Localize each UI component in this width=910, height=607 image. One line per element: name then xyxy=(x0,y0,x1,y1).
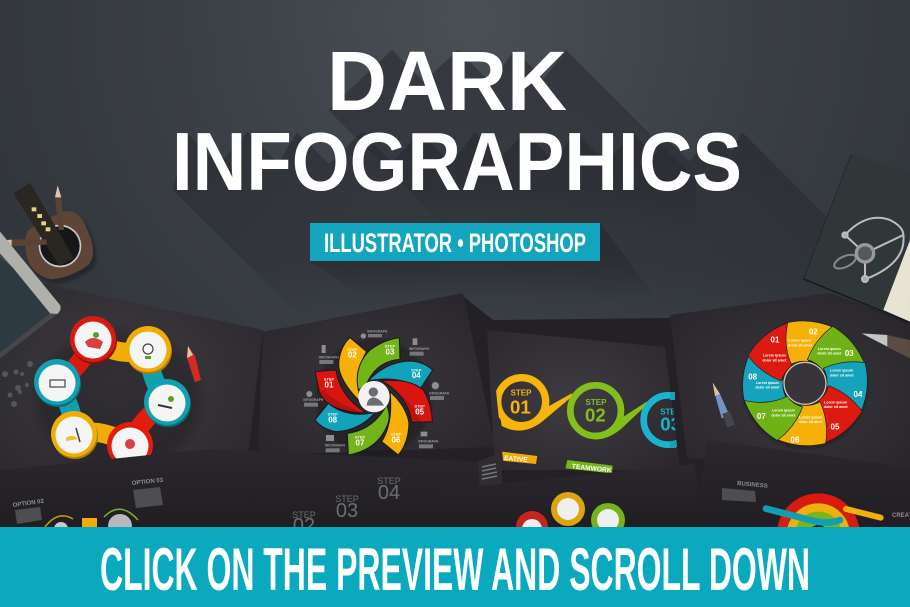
panel: lower left sheet xyxy=(0,449,218,527)
icon: pen xyxy=(862,333,910,358)
side captions: INFOGRAPH xyxy=(409,347,430,351)
step 03 text xyxy=(660,408,676,430)
label creative xyxy=(502,452,537,464)
infographic: six circle ring xyxy=(34,316,200,470)
petal 01 xyxy=(315,370,367,413)
step 01 ring xyxy=(498,378,573,431)
petal 06 xyxy=(382,392,409,455)
center person icon xyxy=(358,381,390,412)
icon: silver ornament xyxy=(832,218,904,282)
lower middle steps: 04 xyxy=(378,482,400,504)
segment captions: Lorem ipsum xyxy=(799,415,823,419)
step 03 text: STEP xyxy=(660,407,682,416)
segment numbers: 01 xyxy=(771,336,780,345)
segment captions: Lorem ipsum xyxy=(772,409,796,413)
side captions xyxy=(303,329,450,448)
segment captions: dolor sit amet xyxy=(799,420,823,424)
panel: wheel four sheet xyxy=(670,293,910,470)
segment captions: dolor sit amet xyxy=(771,413,796,417)
segment captions: Lorem ipsum xyxy=(763,354,787,358)
label creative: EATIVE xyxy=(504,455,528,464)
step teal left xyxy=(34,359,81,407)
petal 02 xyxy=(339,338,367,402)
lower middle steps: STEP xyxy=(335,494,359,504)
step labels xyxy=(324,344,425,447)
segment numbers: 04 xyxy=(854,390,863,399)
connectors xyxy=(57,340,167,445)
icon: ruler xyxy=(13,183,74,266)
step 01 text: 01 xyxy=(510,396,531,417)
step 01 text: STEP xyxy=(511,389,532,398)
step 03 ring xyxy=(640,392,677,448)
segment numbers: 07 xyxy=(757,412,766,421)
lower right captions: BUSINESS xyxy=(737,481,768,490)
panel: lower right sheet xyxy=(695,440,910,527)
ring hole xyxy=(783,362,827,405)
lower middle steps: 03 xyxy=(336,500,358,522)
segment captions: Lorem ipsum xyxy=(789,339,812,343)
lower left sheet text: OPTION 03 xyxy=(132,478,164,487)
step 02 text: 02 xyxy=(585,405,606,426)
step labels: 05 xyxy=(415,407,425,416)
panel: lower right stack xyxy=(440,464,700,527)
side captions: INFOGRAPH xyxy=(429,391,450,395)
step red bottom xyxy=(107,422,153,468)
infographic: spiral eight steps xyxy=(303,329,450,455)
petal 08 xyxy=(315,403,375,432)
segment numbers: 08 xyxy=(748,372,758,381)
step labels: 02 xyxy=(348,351,357,360)
segment captions: dolor sit amet xyxy=(762,358,787,362)
title: DARK xyxy=(327,34,567,128)
petal 05 xyxy=(382,380,432,422)
notebook with ornament xyxy=(803,153,910,323)
step labels: STEP xyxy=(347,347,358,352)
lower middle steps: STEP xyxy=(377,476,401,486)
tablet xyxy=(0,232,61,358)
side captions: INFOGRAPH xyxy=(319,355,339,359)
panel: wheel one sheet xyxy=(0,275,263,480)
step labels: STEP xyxy=(324,377,335,382)
label teamwork xyxy=(565,460,613,474)
lower left sheet chart xyxy=(45,509,138,527)
lower right caption lines xyxy=(722,488,756,502)
petal shading xyxy=(319,381,422,422)
badge: illustrator photoshop xyxy=(310,223,600,261)
panel: wheel two sheet xyxy=(258,293,495,455)
step 02 ring xyxy=(570,385,648,439)
segment captions: dolor sit amet xyxy=(817,352,842,356)
segment captions: dolor sit amet xyxy=(788,343,813,347)
side captions: INFOGRAPH xyxy=(418,440,439,444)
segment captions: Lorem ipsum xyxy=(830,369,854,373)
step labels: 04 xyxy=(412,371,421,380)
small teal lines at sheet edge xyxy=(670,392,676,448)
step labels: STEP xyxy=(327,412,338,417)
lower middle steps: 02 xyxy=(293,515,315,537)
step labels: STEP xyxy=(355,435,366,440)
segment captions: Lorem ipsum xyxy=(824,400,848,404)
icon: red pencil xyxy=(187,346,201,382)
panel: wheel three sheet xyxy=(487,330,680,470)
lower middle steps: STEP xyxy=(292,510,316,520)
lower middle steps xyxy=(292,476,401,537)
title long shadows xyxy=(173,50,872,320)
icon: pencil horizontal xyxy=(0,239,47,246)
step labels: 06 xyxy=(392,435,401,444)
step labels: 03 xyxy=(386,347,395,356)
lower left sheet text: OPTION 02 xyxy=(12,499,45,509)
petal 04 xyxy=(368,361,433,389)
panel: lower middle sheet xyxy=(208,449,485,527)
icon: blue pencil xyxy=(713,383,735,427)
badge: illustrator photoshop: ILLUSTRATOR • PHOTOSHOP xyxy=(324,228,586,258)
segment numbers: 03 xyxy=(845,349,854,358)
segments xyxy=(739,318,871,449)
segment captions: dolor sit amet xyxy=(830,373,854,377)
segment captions: Lorem ipsum xyxy=(818,347,842,351)
step 03 text: 03 xyxy=(660,414,681,435)
title xyxy=(172,34,742,208)
step labels: 07 xyxy=(356,438,365,447)
side captions: INFOGRAPH xyxy=(367,329,388,333)
segment numbers: 05 xyxy=(831,422,840,431)
side icons xyxy=(306,333,439,441)
side captions: INFOGRAPH xyxy=(325,444,346,448)
step labels: STEP xyxy=(414,404,425,409)
segment numbers: 02 xyxy=(809,327,818,336)
step labels: 08 xyxy=(328,415,338,424)
step red top xyxy=(70,316,117,364)
step teal right xyxy=(144,379,191,427)
segment captions xyxy=(755,339,854,424)
lower left sheet text xyxy=(12,478,164,509)
side captions: INFOGRAPH xyxy=(303,398,324,402)
segment captions: Lorem ipsum xyxy=(756,381,780,385)
segment numbers xyxy=(748,327,863,445)
icon: pencil upright xyxy=(55,185,64,230)
lower right captions xyxy=(737,481,910,519)
step labels: 01 xyxy=(325,380,334,389)
step labels: STEP xyxy=(391,432,402,437)
segment captions: dolor sit amet xyxy=(824,405,848,409)
pen cup with ruler and pencils xyxy=(0,183,96,284)
step 02 text: STEP xyxy=(586,398,607,407)
sliver panel with lines xyxy=(478,452,503,492)
step yellow left xyxy=(51,411,98,459)
side caption lines xyxy=(304,334,444,452)
label teamwork: TEAMWORK xyxy=(571,463,612,474)
petal 07 xyxy=(347,405,389,455)
step yellow xyxy=(125,326,172,374)
step labels: STEP xyxy=(411,367,422,372)
step 02 text xyxy=(586,399,606,422)
sheets base xyxy=(0,270,910,527)
infographic: swirled ring xyxy=(713,318,910,449)
segment numbers: 06 xyxy=(791,436,800,445)
lower left sheet chips xyxy=(54,514,132,538)
small circles chain xyxy=(516,492,625,543)
segment captions: dolor sit amet xyxy=(755,386,780,390)
icon: scattered bolts xyxy=(2,361,33,407)
step labels: STEP xyxy=(385,344,396,349)
petal 03 xyxy=(357,338,400,390)
step 01 text xyxy=(510,390,532,414)
title: INFOGRAPHICS xyxy=(172,115,742,208)
lower left caption lines xyxy=(15,487,163,524)
infographic: step chain xyxy=(498,378,693,474)
rainbow arcs xyxy=(766,498,881,572)
